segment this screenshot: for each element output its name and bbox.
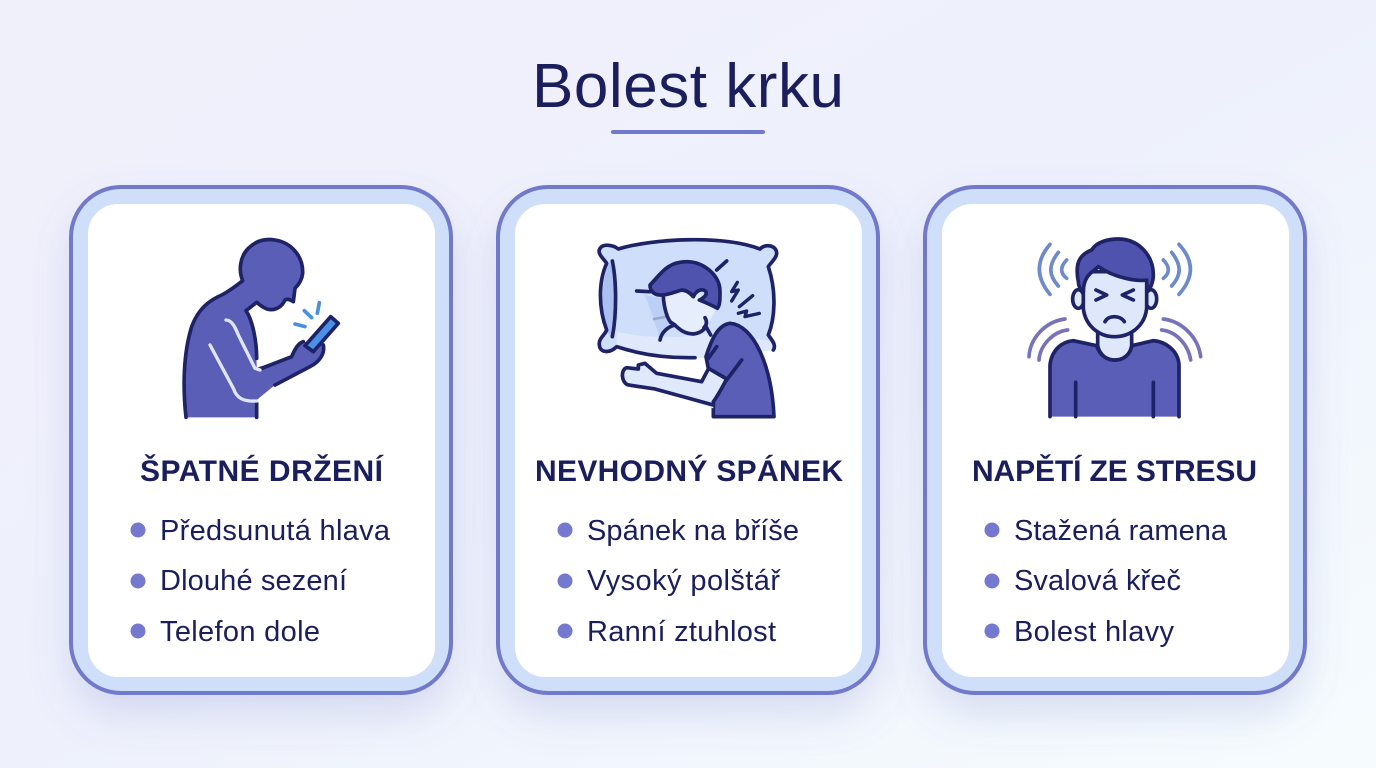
card frame [498,187,878,693]
ears [1073,290,1084,308]
shirt [1050,341,1179,417]
list: Vysoký polštář [587,565,781,597]
shoulder vibration waves [1029,319,1201,360]
list [130,515,391,648]
title: Bolest krku [532,52,844,121]
list [984,515,1228,648]
phone rays [295,303,319,327]
list: Bolest hlavy [1014,616,1174,648]
icon: person looking at phone [184,240,338,417]
hair [1077,239,1153,292]
list: Stažená ramena [1014,515,1228,547]
list: Telefon dole [160,616,320,648]
list: Dlouhé sezení [160,565,347,597]
icon: stressed person [1029,239,1201,417]
eyes and mouth [1096,290,1133,322]
panel: špatné držení [71,187,451,693]
panel: napětí ze stresu [925,187,1305,693]
hair [650,262,720,308]
head vibration waves [1039,244,1190,294]
list: Ranní ztuhlost [587,616,776,648]
card inner [515,204,862,677]
arm [622,363,727,408]
panel: nevhodný spánek [498,187,878,693]
title underline [611,130,765,134]
shirt [706,323,774,417]
card inner [88,204,435,677]
pillow shadow [645,295,673,338]
heading: NAPĚTÍ ZE STRESU [972,454,1257,488]
pillow [599,240,777,358]
heading: ŠPATNÉ DRŽENÍ [140,454,384,488]
list [558,515,799,648]
list: Spánek na bříše [587,515,799,547]
face [663,292,717,334]
pain bolts [732,282,759,317]
list: Svalová křeč [1014,565,1181,597]
card frame [71,187,451,693]
card inner [942,204,1289,677]
icon: person sleeping on pillow [599,240,777,417]
neck [1098,332,1132,360]
face [1083,272,1147,337]
card frame [925,187,1305,693]
heading: NEVHODNÝ SPÁNEK [535,454,843,488]
phone [305,317,338,352]
list: Předsunutá hlava [160,515,391,547]
